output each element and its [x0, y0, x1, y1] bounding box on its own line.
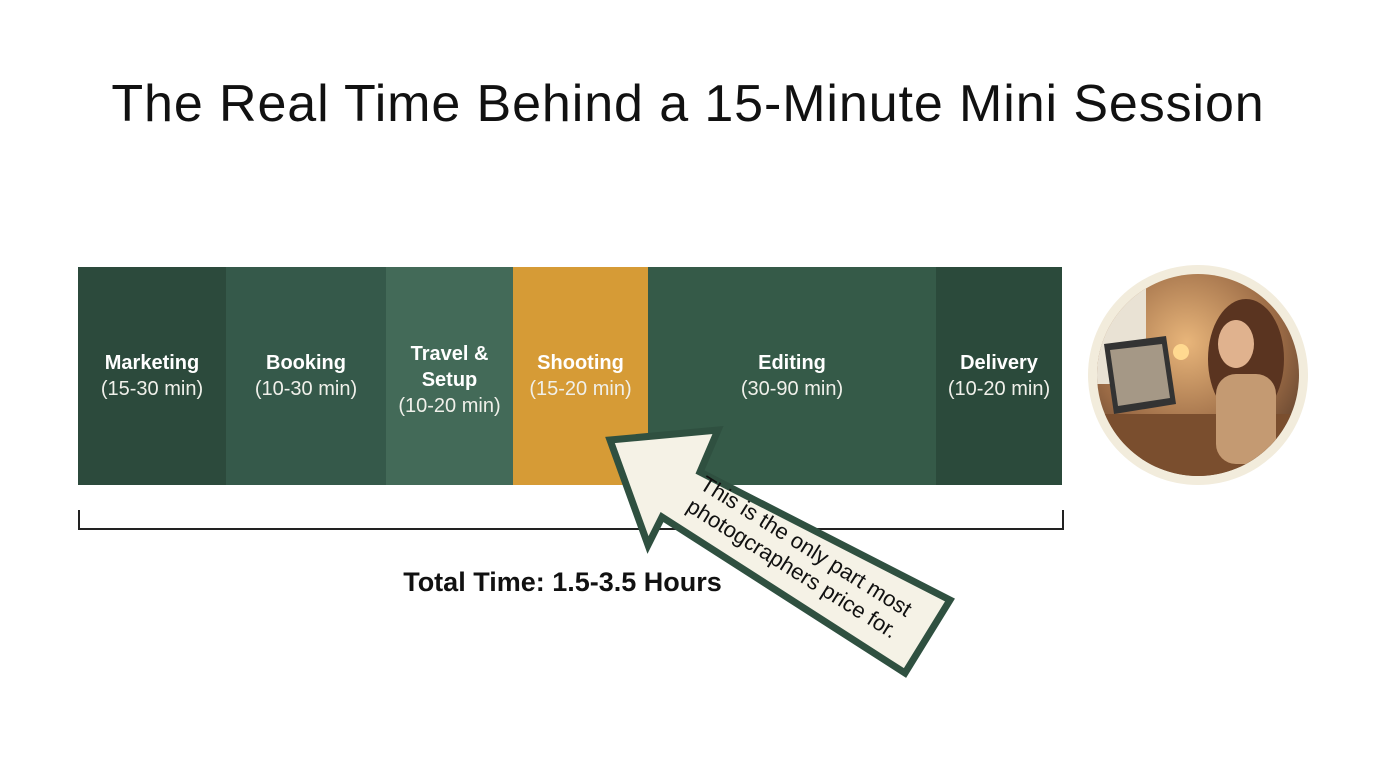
segment: booking: (10-30 min) [255, 378, 357, 400]
callout arrow: This is the only part most [696, 471, 916, 622]
segment: delivery: Delivery [960, 352, 1038, 374]
segment: marketing [78, 267, 226, 485]
segment: delivery: (10-20 min) [948, 378, 1050, 400]
segment: shooting: Shooting [537, 352, 624, 374]
segment: booking [226, 267, 386, 485]
segment: shooting: (15-20 min) [529, 378, 632, 400]
segment: editing [648, 267, 936, 485]
segment: delivery [936, 267, 1062, 485]
callout arrow: photogcraphers price for. [682, 493, 902, 643]
title: The Real Time Behind a 15-Minute Mini Session [111, 75, 1265, 133]
segment: travel: Setup [422, 369, 477, 391]
segment: marketing: Marketing [105, 352, 199, 374]
bracket [78, 510, 1064, 530]
segment: editing: (30-90 min) [741, 378, 843, 400]
segment: editing: Editing [758, 352, 826, 374]
segment: travel: Travel & [411, 343, 488, 365]
segment: marketing: (15-30 min) [101, 378, 203, 400]
segment: booking: Booking [266, 352, 346, 374]
total time label: Total Time: 1.5-3.5 Hours [403, 567, 722, 597]
segment: shooting [513, 267, 648, 485]
timeline bar [78, 267, 1062, 485]
photo: photographer editing at laptop [1088, 265, 1308, 485]
segment: travel [386, 267, 513, 485]
segment: travel: (10-20 min) [398, 395, 501, 417]
